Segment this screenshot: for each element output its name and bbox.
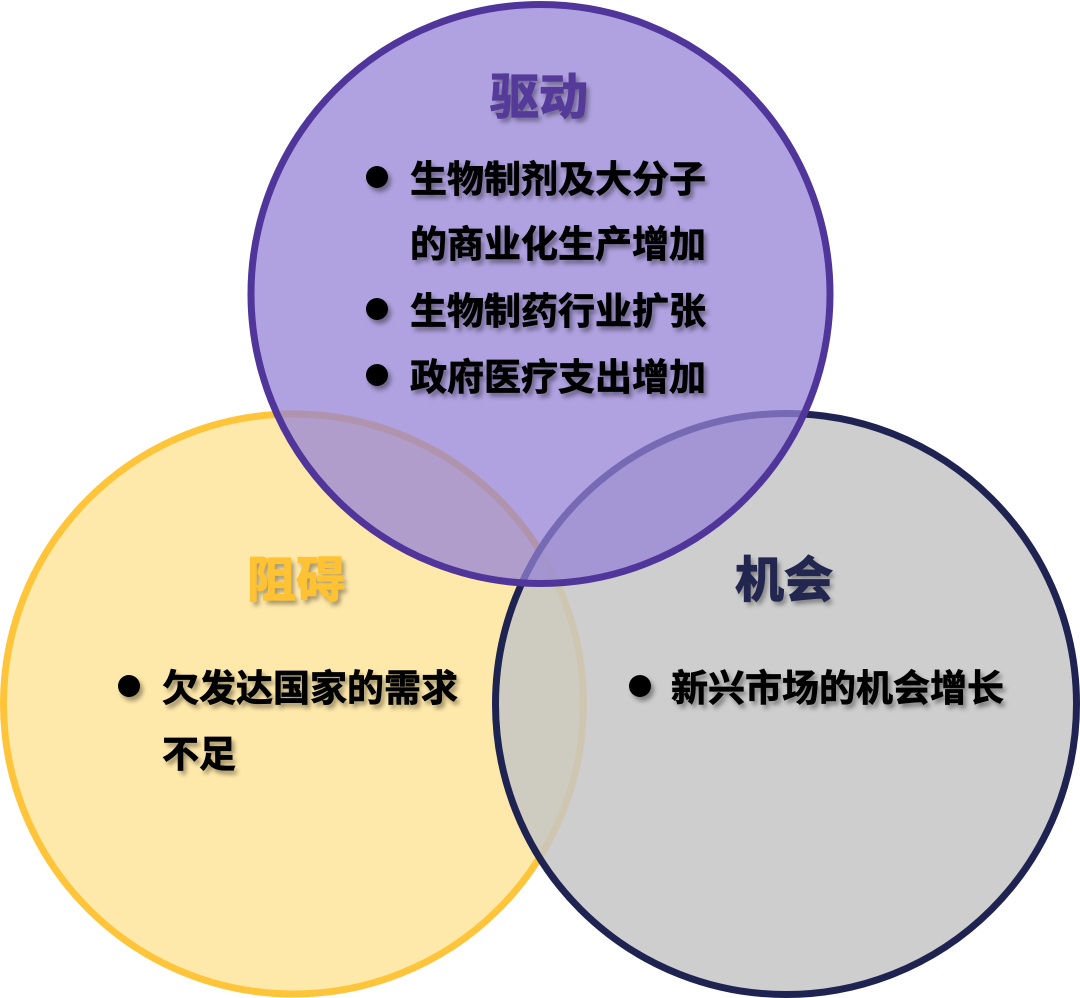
heading: barriers: 阻碍: [247, 554, 345, 608]
text: insufficient demand line 2: 不足: [162, 734, 236, 775]
text: emerging markets: 新兴市场的机会增长: [671, 668, 1004, 709]
bullet: [366, 166, 388, 188]
bullet: [629, 675, 651, 697]
panel: opportunities text: [629, 554, 1008, 712]
text: government spending: 政府医疗支出增加: [410, 357, 706, 398]
text: biologics line 1: 生物制剂及大分子: [410, 159, 706, 200]
circle: opportunities (grey): [496, 414, 1076, 994]
panel: barriers text: [118, 554, 462, 778]
panel: drivers text: [366, 71, 710, 400]
circle: drivers (purple): [251, 4, 830, 584]
bullet: [366, 298, 388, 320]
bullet: [118, 675, 140, 697]
heading: drivers: 驱动: [490, 71, 588, 125]
bullet: [366, 364, 388, 386]
text: biopharma expansion: 生物制药行业扩张: [410, 291, 706, 332]
text: biologics line 2: 的商业化生产增加: [410, 224, 706, 265]
circle: barriers (yellow): [4, 414, 584, 994]
heading: opportunities: 机会: [735, 554, 833, 608]
text: insufficient demand line 1: 欠发达国家的需求: [162, 668, 458, 709]
